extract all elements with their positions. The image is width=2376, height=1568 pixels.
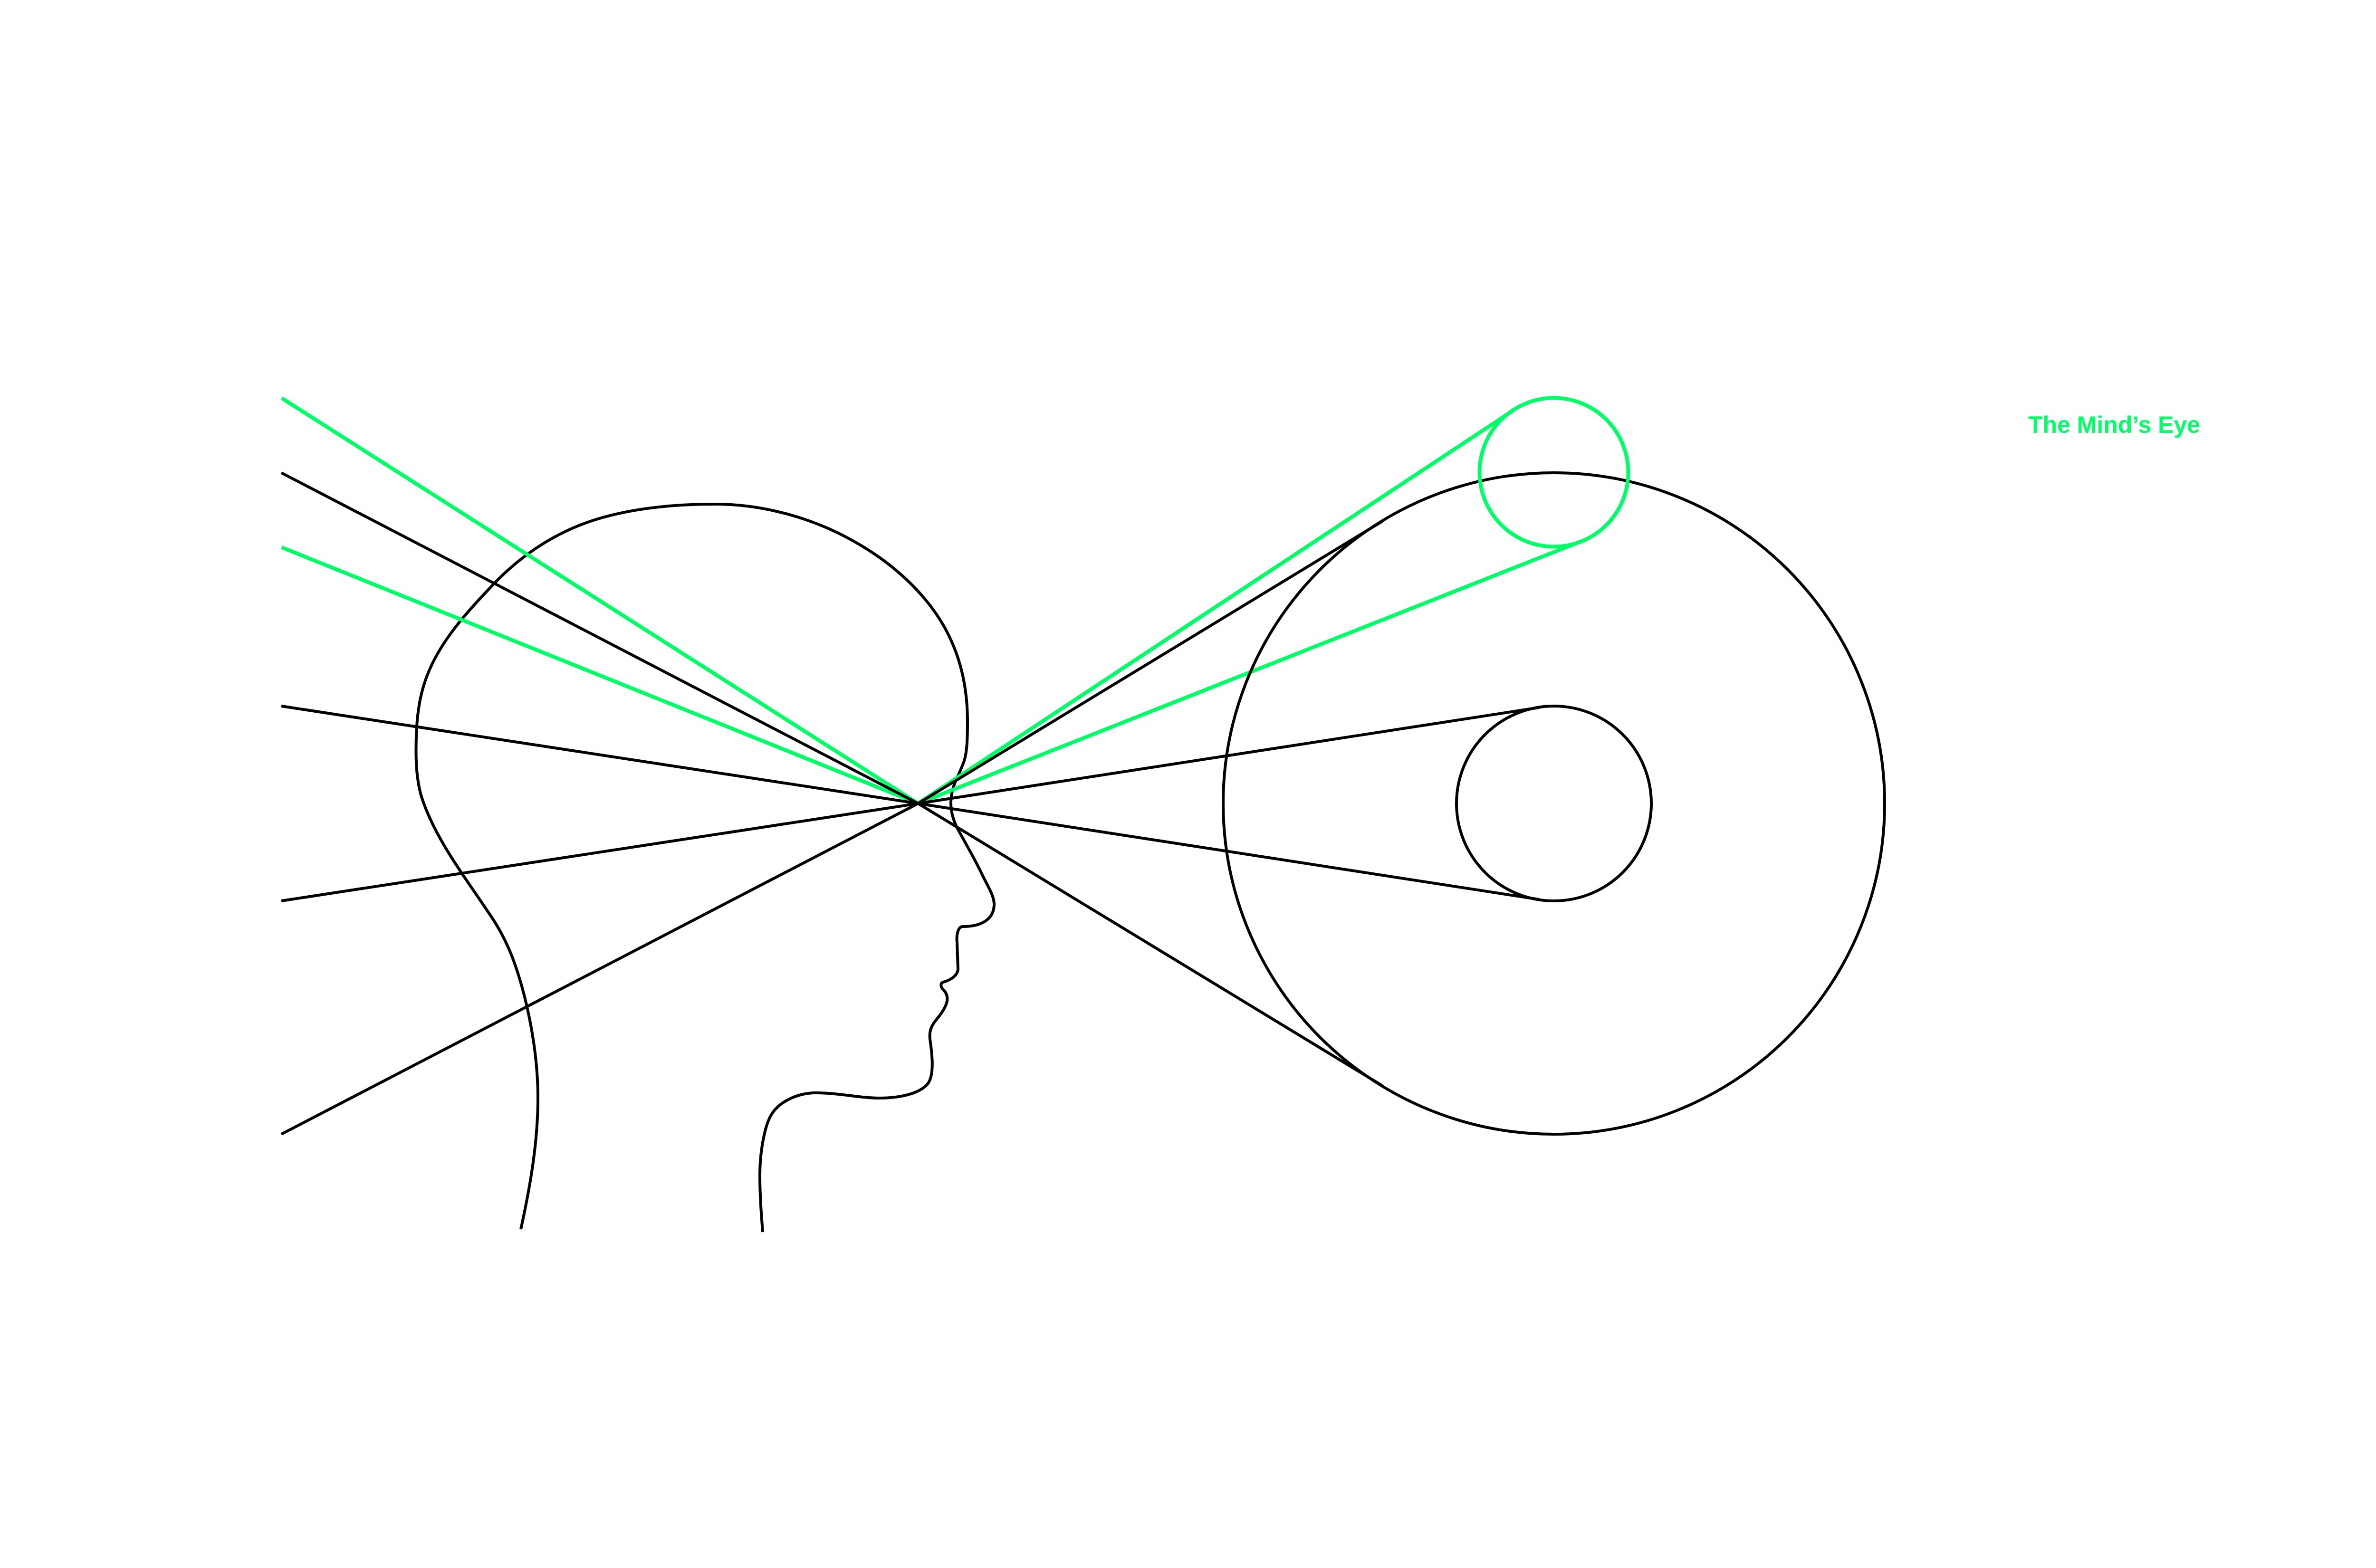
green ray: upper left (282, 398, 918, 803)
black ray: lower tangent to inner circle (918, 803, 1539, 899)
black ray: upper tangent to large circle (918, 521, 1382, 803)
black ray: middle lower left (281, 803, 918, 901)
black ray: upper tangent to inner circle (918, 708, 1539, 803)
black ray: lower tangent to large circle (918, 803, 1382, 1086)
green ray: upper tangent to small green circle (918, 411, 1513, 803)
large black circle (1223, 473, 1885, 1134)
black ray: bottom left (281, 803, 918, 1134)
small green circle (1480, 398, 1628, 546)
green ray: lower tangent to small green circle (918, 541, 1581, 803)
title: The Mind's Eye: The Mind’s Eye (2028, 411, 2200, 438)
black ray: top left (281, 473, 918, 803)
black ray: middle upper left (281, 706, 918, 803)
head profile outline (416, 504, 994, 1232)
inner black circle (1456, 706, 1651, 901)
green ray: lower left (282, 547, 918, 803)
green rays (282, 398, 1581, 803)
black rays (281, 473, 1539, 1134)
